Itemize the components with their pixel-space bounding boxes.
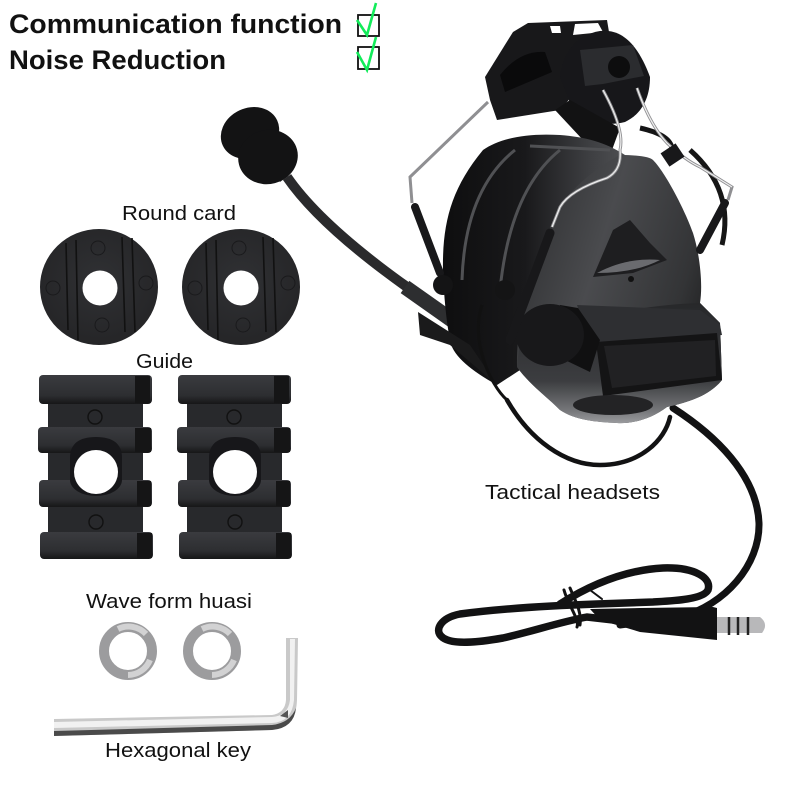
label: wave form huasi: Wave form huasi (86, 591, 252, 613)
wave washer left (104, 627, 152, 675)
vent shape (593, 220, 667, 277)
heading: communication function: Communication function (9, 9, 342, 39)
label: guide: Guide (136, 351, 193, 373)
microphone boom (277, 172, 490, 347)
control buttons (573, 395, 653, 415)
label: hexagonal key: Hexagonal key (105, 740, 251, 762)
icon: checkbox noise reduction (357, 37, 379, 70)
headband wires (410, 88, 732, 227)
guide rail right (177, 375, 292, 559)
ear cushion (443, 135, 625, 385)
ear cup shell (517, 155, 722, 423)
label: round card: Round card (122, 203, 236, 225)
heading: noise reduction: Noise Reduction (9, 45, 226, 75)
ear cup lower section (517, 303, 722, 423)
inner thin cable (478, 305, 507, 400)
pivot screws (433, 275, 515, 300)
hexagonal key tool (54, 638, 298, 736)
heading: feature checklist (9, 3, 379, 75)
connector plug (590, 607, 765, 640)
icon: checkbox communication (357, 3, 379, 36)
label: tactical headsets: Tactical headsets (485, 482, 660, 504)
round card left (40, 229, 158, 345)
headband holders (415, 150, 725, 340)
wave washer right (188, 627, 236, 675)
lower block behind boom (418, 312, 497, 385)
cushion highlights (462, 146, 610, 290)
helmet mount (485, 20, 725, 245)
round card right (182, 229, 300, 345)
cable with connector (439, 400, 759, 642)
microphone foam (212, 98, 304, 191)
battery compartment (577, 305, 722, 396)
vent highlight (597, 260, 660, 273)
side foam mic (516, 304, 600, 372)
wire highlights (552, 88, 732, 227)
tactical headset (212, 20, 765, 642)
guide rail left (38, 375, 153, 559)
